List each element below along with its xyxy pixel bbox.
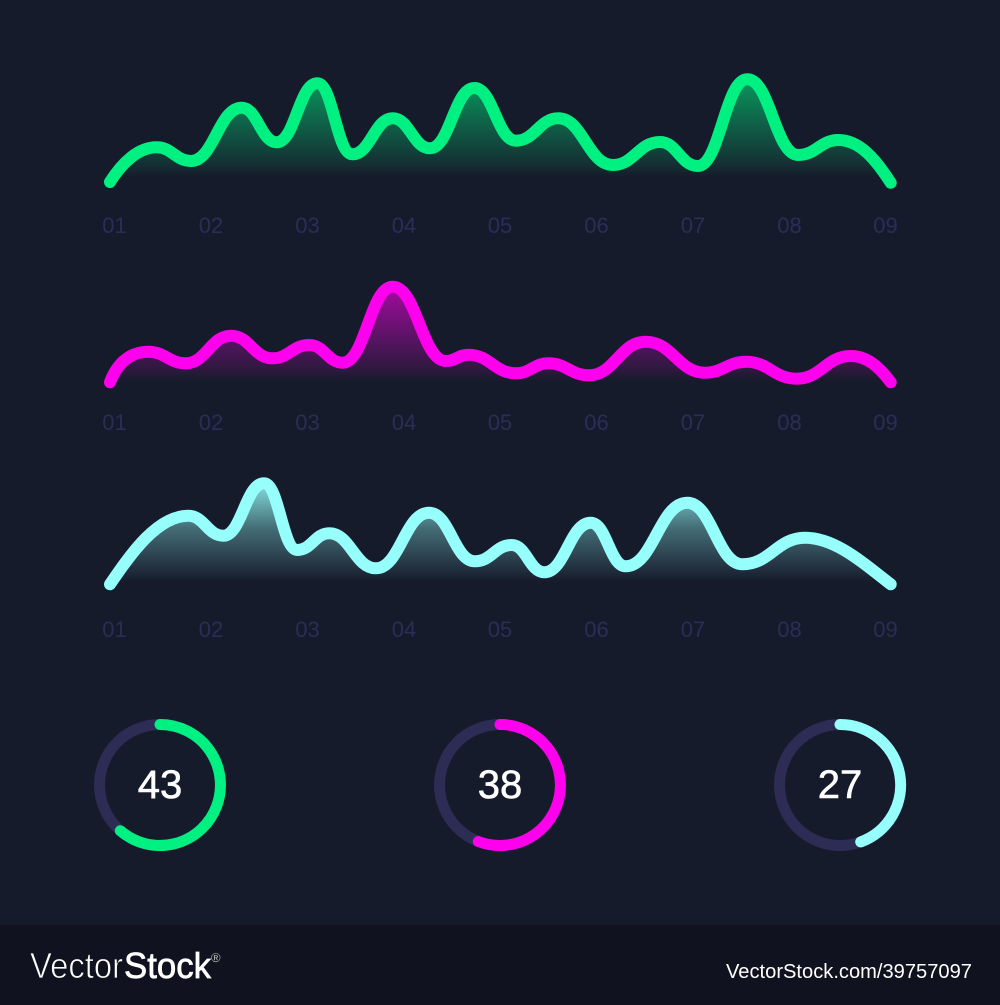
footer bar — [0, 925, 1000, 1005]
footer logo: ® — [211, 950, 221, 965]
axis labels: green chart: 02 — [199, 213, 223, 238]
donut gauge: 27 cyan: 27 — [818, 763, 862, 807]
axis labels: magenta chart: 04 — [392, 410, 416, 435]
footer logo — [30, 945, 221, 986]
axis labels: cyan chart: 05 — [488, 617, 512, 642]
area fill: magenta — [110, 287, 891, 382]
area fill: cyan — [110, 483, 891, 584]
axis labels: green chart: 07 — [681, 213, 705, 238]
line: magenta — [110, 287, 891, 382]
axis labels: cyan chart: 09 — [873, 617, 898, 642]
axis labels: magenta chart: 06 — [584, 410, 609, 435]
footer logo: Stock — [124, 945, 212, 986]
axis labels: magenta chart: 01 — [102, 410, 127, 435]
footer image id: VectorStock.com/39757097 — [726, 961, 972, 983]
axis labels: green chart: 06 — [584, 213, 609, 238]
donut gauge: 43 green: 43 — [138, 763, 182, 807]
axis labels: green chart: 03 — [295, 213, 320, 238]
axis labels: green chart: 01 — [102, 213, 127, 238]
line chart: cyan — [102, 483, 898, 642]
axis labels: green chart: 05 — [488, 213, 512, 238]
axis labels: cyan chart: 02 — [199, 617, 223, 642]
donut gauge: 38 magenta: 38 — [478, 763, 522, 807]
line chart: green — [102, 79, 898, 238]
axis labels: magenta chart: 07 — [681, 410, 705, 435]
donut gauge: 27 cyan — [780, 724, 901, 846]
axis labels: magenta chart — [102, 410, 898, 435]
donut gauge: 43 green — [100, 724, 220, 846]
axis labels: magenta chart: 09 — [873, 410, 898, 435]
axis labels: magenta chart: 05 — [488, 410, 512, 435]
axis labels: cyan chart: 08 — [777, 617, 802, 642]
line: cyan — [110, 483, 891, 584]
axis labels: green chart: 08 — [777, 213, 802, 238]
footer logo: Vector — [30, 945, 123, 986]
line chart: magenta — [102, 287, 898, 435]
axis labels: cyan chart — [102, 617, 898, 642]
axis labels: green chart: 04 — [392, 213, 416, 238]
donut gauge: 38 magenta — [440, 724, 560, 846]
axis labels: green chart: 09 — [873, 213, 898, 238]
axis labels: cyan chart: 01 — [102, 617, 127, 642]
axis labels: magenta chart: 08 — [777, 410, 802, 435]
line: green — [110, 79, 891, 183]
axis labels: cyan chart: 03 — [295, 617, 320, 642]
axis labels: cyan chart: 06 — [584, 617, 609, 642]
area fill: green — [110, 79, 891, 183]
axis labels: cyan chart: 07 — [681, 617, 705, 642]
axis labels: cyan chart: 04 — [392, 617, 416, 642]
axis labels: magenta chart: 02 — [199, 410, 223, 435]
axis labels: magenta chart: 03 — [295, 410, 320, 435]
axis labels: green chart — [102, 213, 898, 238]
